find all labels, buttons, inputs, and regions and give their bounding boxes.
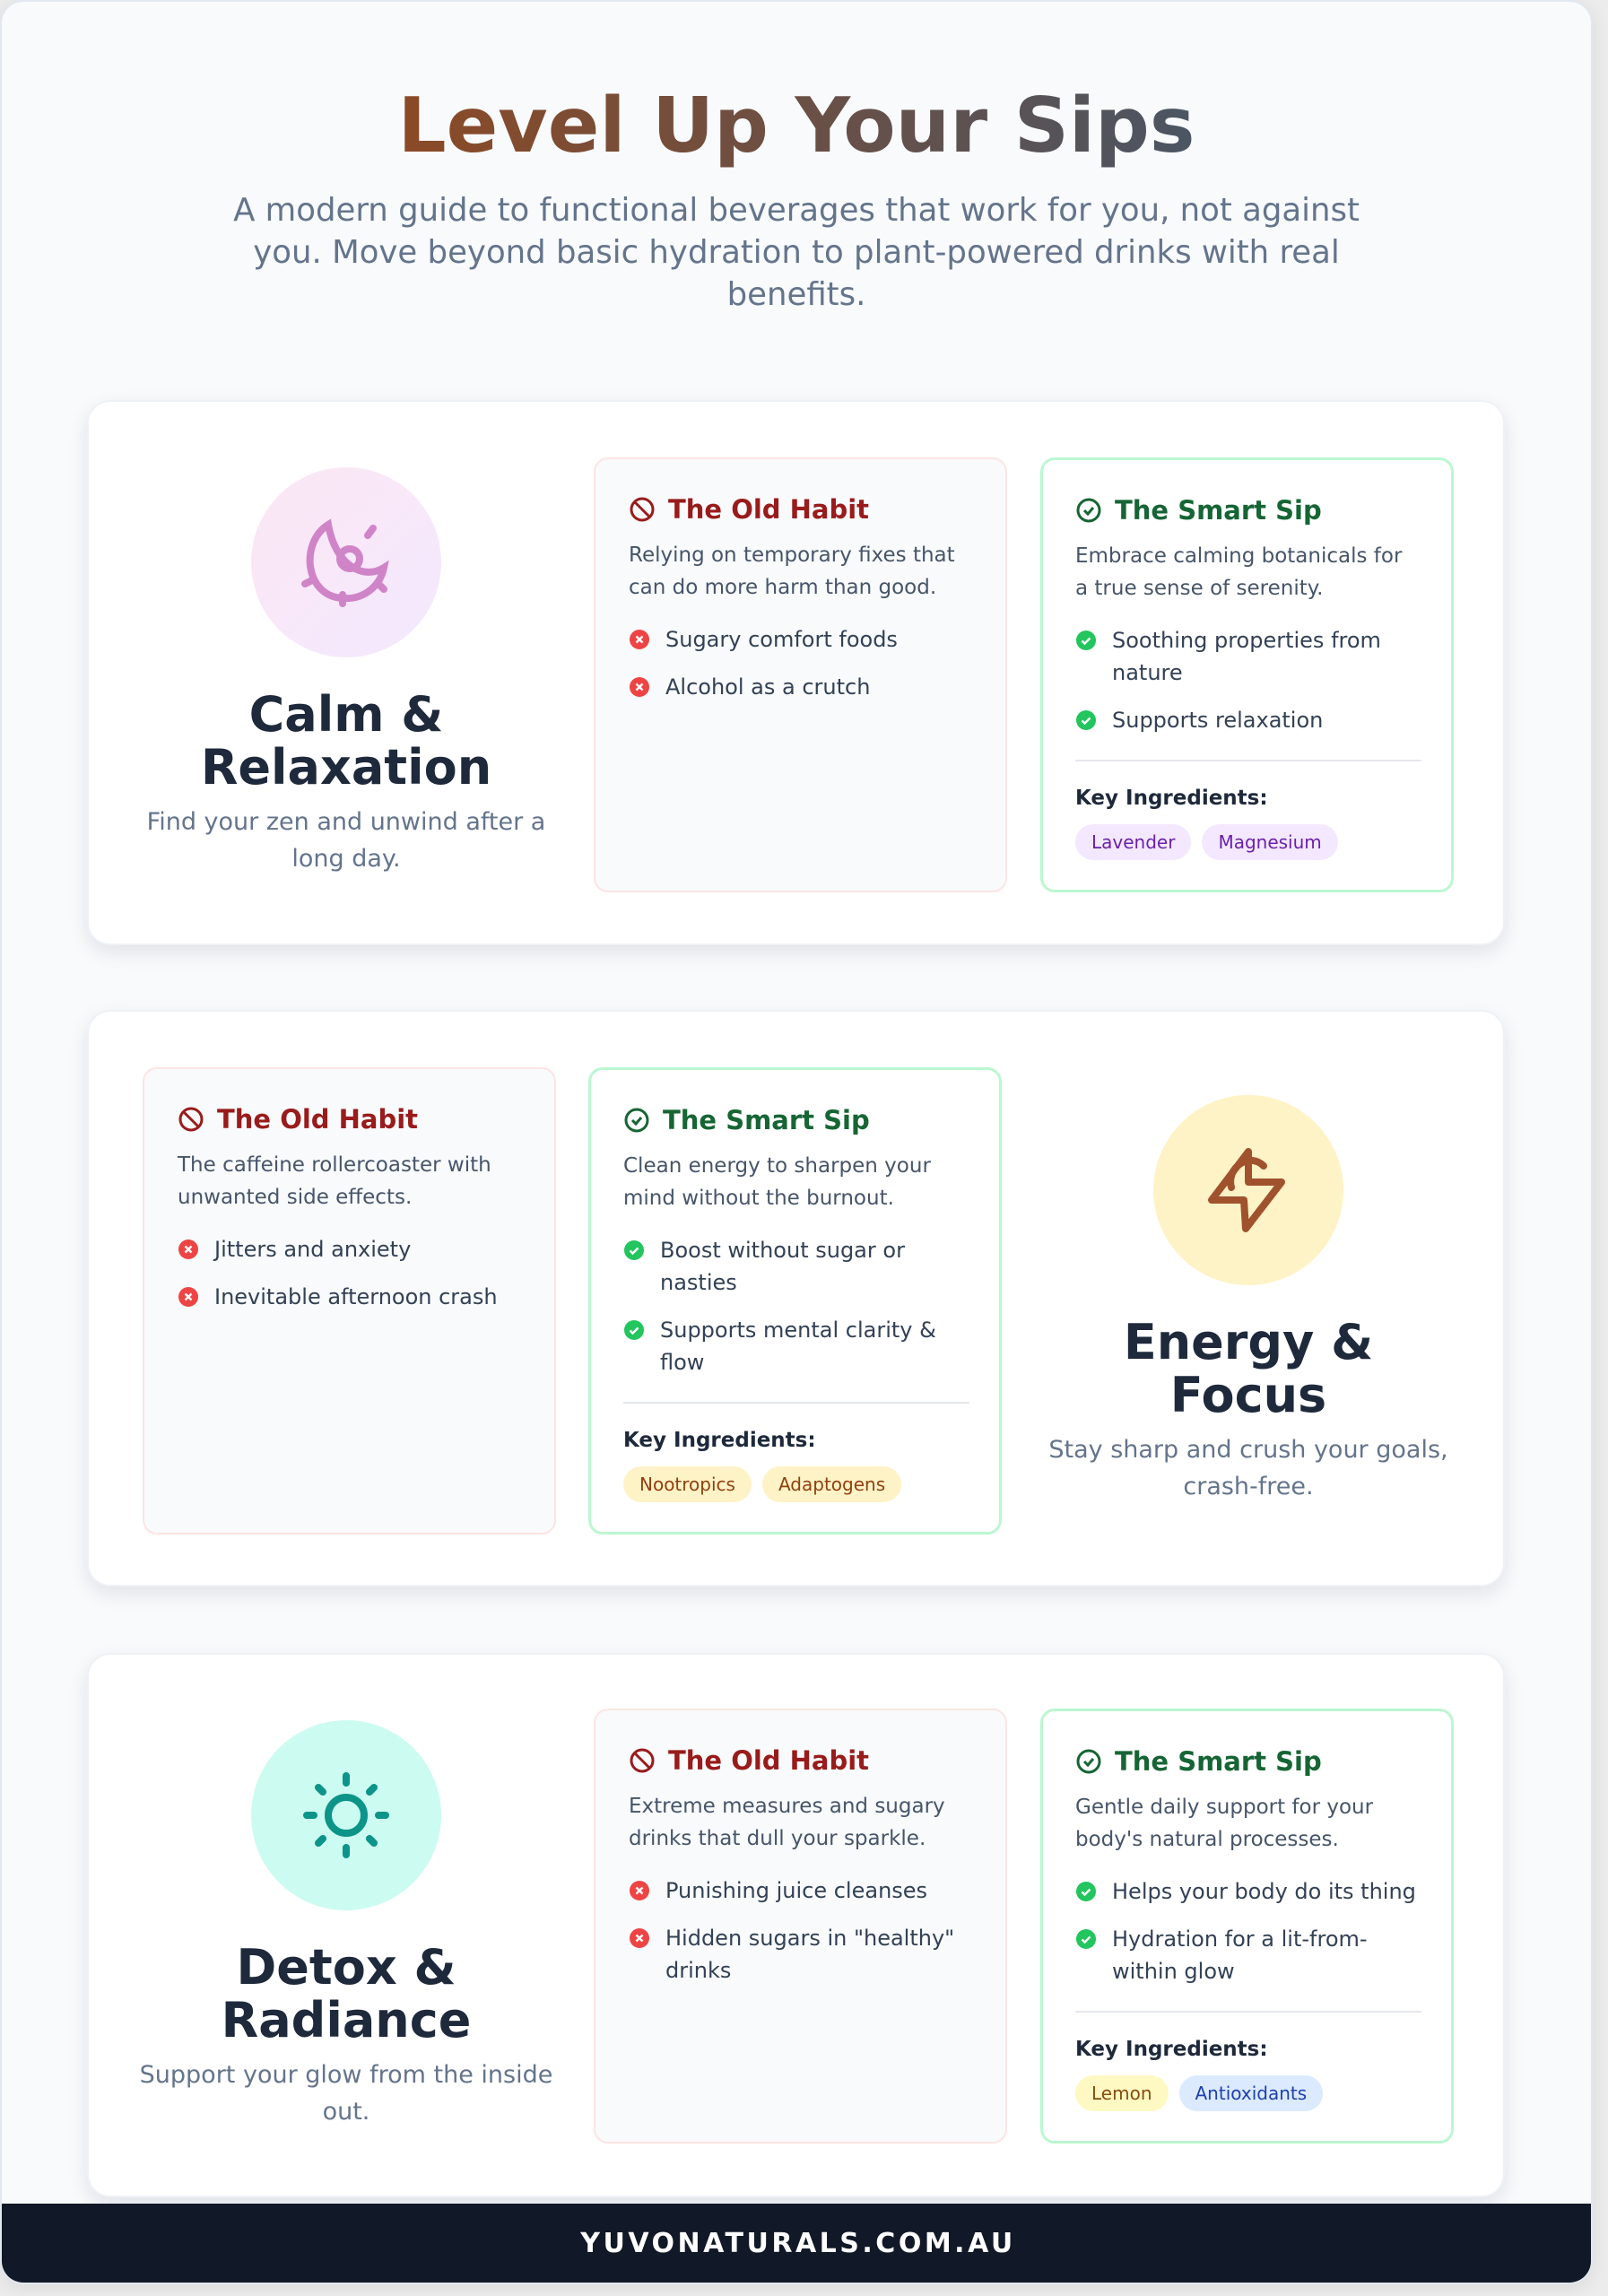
description xyxy=(147,808,545,873)
box: old habit: Hidden sugars in "healthy" xyxy=(665,1926,954,1951)
icon: bolt xyxy=(1153,1095,1343,1285)
heading: Focus xyxy=(1170,1367,1326,1423)
box: smart sip: within glow xyxy=(1112,1959,1235,1984)
description: long day. xyxy=(291,845,401,873)
box: smart sip: Boost without sugar or xyxy=(660,1238,905,1263)
box: smart sip: Key Ingredients: xyxy=(1075,787,1268,810)
box: smart sip: Soothing properties from xyxy=(1112,628,1381,653)
box: smart sip xyxy=(1040,457,1454,892)
box: old habit: drinks that dull your sparkle. xyxy=(629,1827,926,1850)
box: old habit xyxy=(143,1067,556,1535)
box: old habit: The Old Habit xyxy=(217,1104,418,1135)
pills: Magnesium xyxy=(1218,831,1322,853)
heading: Radiance xyxy=(222,1992,471,2048)
box: old habit: The Old Habit xyxy=(668,494,869,525)
box: smart sip: Helps your body do its thing xyxy=(1112,1879,1416,1904)
panel: energy & focus xyxy=(87,1010,1505,1587)
description: Find your zen and unwind after a xyxy=(147,808,545,836)
heading: Detox & xyxy=(236,1939,456,1996)
box: smart sip: The Smart Sip xyxy=(663,1105,870,1135)
box: old habit: The caffeine rollercoaster with xyxy=(178,1153,491,1177)
pills: Lemon xyxy=(1091,2083,1152,2104)
category: calm xyxy=(147,467,545,873)
footer: YUVONATURALS.COM.AU xyxy=(580,2228,1016,2259)
pills xyxy=(1075,2075,1323,2111)
heading: Energy & xyxy=(1124,1314,1373,1370)
heading: Calm & xyxy=(249,686,443,743)
category: detox xyxy=(140,1720,552,2126)
footer xyxy=(2,2204,1595,2286)
box: old habit: Relying on temporary fixes that xyxy=(629,544,955,567)
pills: Adaptogens xyxy=(778,1474,885,1495)
box: old habit: can do more harm than good. xyxy=(629,576,936,599)
box: smart sip: Embrace calming botanicals for xyxy=(1075,544,1402,568)
box: smart sip: Gentle daily support for your xyxy=(1075,1796,1373,1819)
box: smart sip: Supports mental clarity & xyxy=(660,1318,936,1343)
box: smart sip: Clean energy to sharpen your xyxy=(623,1154,931,1178)
box: smart sip: flow xyxy=(660,1350,704,1375)
subtitle: benefits. xyxy=(727,276,865,313)
title: Level Up Your Sips xyxy=(397,82,1195,170)
box: smart sip: Key Ingredients: xyxy=(623,1429,816,1452)
description: out. xyxy=(323,2098,369,2126)
pills: Antioxidants xyxy=(1195,2083,1307,2104)
pills xyxy=(1075,824,1338,860)
panel: detox & radiance xyxy=(87,1653,1505,2197)
box: smart sip: Supports relaxation xyxy=(1112,708,1323,733)
box: smart sip: Key Ingredients: xyxy=(1075,2038,1268,2061)
box: old habit: Alcohol as a crutch xyxy=(665,674,870,700)
box: smart sip xyxy=(1040,1709,1454,2144)
box: smart sip: nature xyxy=(1112,660,1183,685)
panel: calm & relaxation xyxy=(87,400,1505,945)
box: smart sip: nasties xyxy=(660,1270,737,1295)
box: old habit: unwanted side effects. xyxy=(178,1186,412,1209)
box: smart sip: a true sense of serenity. xyxy=(1075,577,1323,600)
description xyxy=(1048,1436,1448,1500)
box: smart sip: mind without the burnout. xyxy=(623,1187,894,1210)
box: old habit: Extreme measures and sugary xyxy=(629,1795,945,1818)
pills xyxy=(623,1466,901,1502)
subtitle xyxy=(233,192,1360,313)
box: smart sip: Hydration for a lit-from- xyxy=(1112,1926,1368,1952)
box: old habit: Sugary comfort foods xyxy=(665,627,898,652)
box: smart sip: body's natural processes. xyxy=(1075,1828,1339,1851)
box: old habit: drinks xyxy=(665,1958,731,1983)
box: old habit xyxy=(594,1709,1007,2144)
box: smart sip: The Smart Sip xyxy=(1115,1746,1322,1777)
pills: Nootropics xyxy=(639,1474,735,1495)
category: energy xyxy=(1048,1095,1448,1500)
heading: Relaxation xyxy=(201,739,491,796)
subtitle: A modern guide to functional beverages that work for you, not against xyxy=(233,192,1360,229)
subtitle: you. Move beyond basic hydration to plant-powered drinks with real xyxy=(253,234,1340,271)
icon: moon xyxy=(251,467,441,657)
box: old habit xyxy=(594,457,1007,892)
heading xyxy=(201,686,491,796)
box: old habit: The Old Habit xyxy=(668,1745,869,1776)
heading xyxy=(222,1939,471,2048)
description: crash-free. xyxy=(1183,1473,1314,1500)
description xyxy=(140,2061,552,2126)
box: old habit: Punishing juice cleanses xyxy=(665,1878,927,1903)
pills: Lavender xyxy=(1091,831,1175,853)
heading xyxy=(1124,1314,1373,1423)
box: old habit: Jitters and anxiety xyxy=(214,1237,411,1262)
box: smart sip xyxy=(588,1067,1002,1535)
icon: sun xyxy=(251,1720,441,1910)
description: Support your glow from the inside xyxy=(140,2061,552,2089)
description: Stay sharp and crush your goals, xyxy=(1048,1436,1448,1464)
box: smart sip: The Smart Sip xyxy=(1115,495,1322,526)
box: old habit: Inevitable afternoon crash xyxy=(214,1284,498,1309)
